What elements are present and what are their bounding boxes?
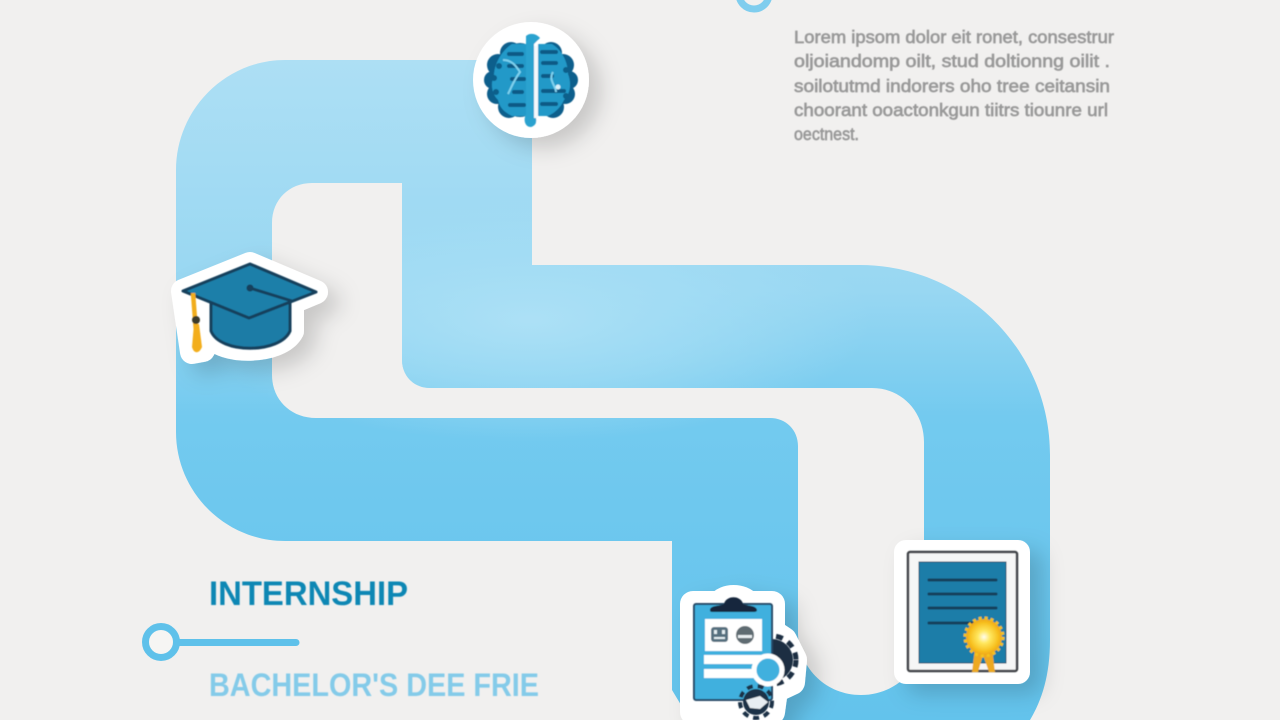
winding career path ribbon <box>176 60 1050 720</box>
icon: clipboard with gears <box>693 597 796 718</box>
top connector ring marker <box>739 0 769 9</box>
heading: bachelor's degree: BACHELOR'S DEE FRIE <box>209 667 539 703</box>
heading: internship: INTERNSHIP <box>209 575 408 613</box>
body text block: soilotutmd indorers oho tree ceitansin <box>794 76 1110 96</box>
body text block: oljoiandomp oilt, stud doltionng oilit . <box>794 51 1110 71</box>
icon: brain <box>473 22 589 138</box>
icon: diploma certificate <box>894 540 1030 684</box>
body text block: Lorem ipsom dolor eit ronet, consestrur <box>794 27 1114 47</box>
timeline marker with connector line <box>146 626 296 658</box>
body text block: choorant ooactonkgun tiitrs tiounre url <box>794 100 1108 120</box>
body text block: oectnest. <box>794 124 859 144</box>
body text block <box>794 27 1114 144</box>
icon: graduation cap <box>183 264 316 352</box>
